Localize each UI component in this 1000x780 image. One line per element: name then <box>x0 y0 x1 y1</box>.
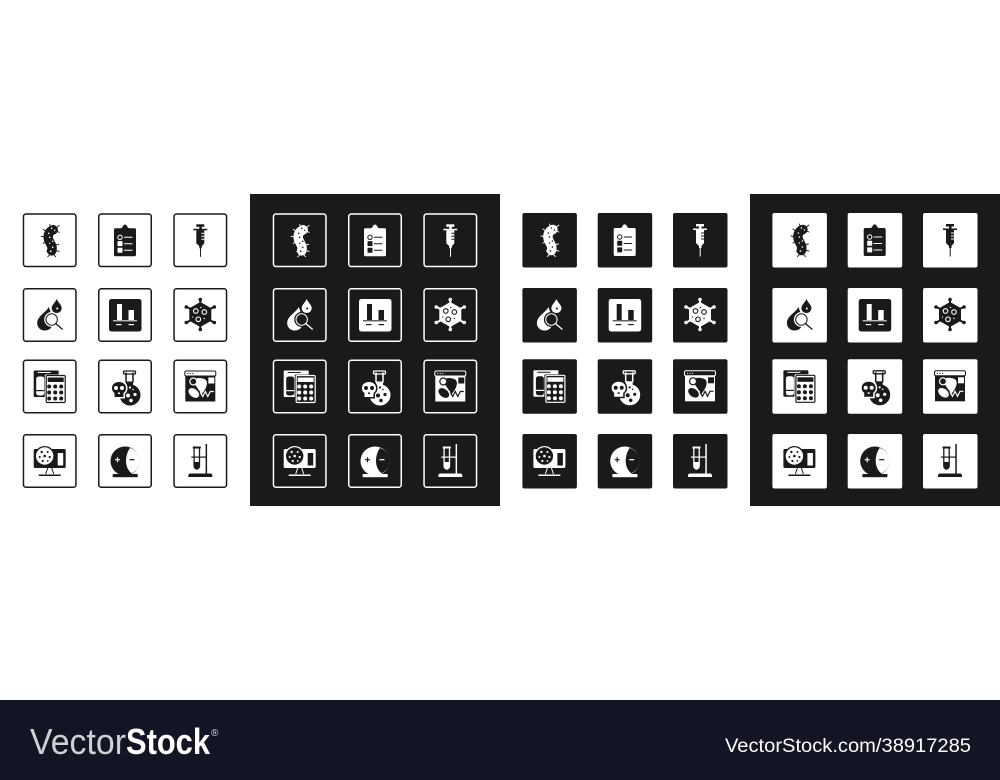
icon: syringe <box>174 214 227 267</box>
icon: petri dish monitor <box>273 435 326 487</box>
icon: flask and skull <box>349 360 401 413</box>
icon: browser window with scan <box>174 360 227 413</box>
icon: bacteria <box>273 214 326 267</box>
icon: bar chart <box>349 289 401 341</box>
icon: blood drop with magnifier <box>273 289 326 341</box>
icon: bacteria <box>23 214 76 267</box>
icon: flask and skull <box>848 359 902 414</box>
icon: flask and skull <box>598 359 652 414</box>
panel: black with outlined tiles <box>250 194 500 506</box>
icon: clipboard checklist <box>848 213 902 268</box>
footer logo: Stock <box>126 721 211 762</box>
icon: bar chart <box>848 288 902 342</box>
icon: virus <box>923 288 978 342</box>
icon: petri dish monitor <box>772 434 827 488</box>
panel: black with solid white tiles <box>750 194 1000 506</box>
icon: bar chart <box>99 289 151 341</box>
icon: clipboard checklist <box>598 213 652 268</box>
icon: virus <box>174 289 227 341</box>
icon: test tube on stand <box>424 435 477 487</box>
icon: calculator and device <box>23 360 76 413</box>
panel: white with solid black tiles <box>522 213 728 488</box>
icon: bar chart <box>598 288 652 342</box>
icon: charge sphere <box>848 434 902 488</box>
icon: charge sphere <box>598 434 652 488</box>
icon: clipboard checklist <box>349 214 401 267</box>
icon: browser window with scan <box>923 359 978 414</box>
icon: syringe <box>673 213 728 268</box>
icon: bacteria <box>522 213 577 268</box>
icon: syringe <box>923 213 978 268</box>
icon: blood drop with magnifier <box>522 288 577 342</box>
icon: virus <box>673 288 728 342</box>
footer logo: ® <box>211 728 219 739</box>
icon: bacteria <box>772 213 827 268</box>
icon: calculator and device <box>522 359 577 414</box>
icon: petri dish monitor <box>23 435 76 487</box>
icon: flask and skull <box>99 360 151 413</box>
icon: syringe <box>424 214 477 267</box>
icon: virus <box>424 289 477 341</box>
panel: white with outlined tiles <box>23 214 227 487</box>
footer image id: VectorStock.com/38917285 <box>725 736 971 757</box>
icon: charge sphere <box>349 435 401 487</box>
icon: calculator and device <box>273 360 326 413</box>
footer bar <box>0 700 1000 780</box>
icon: clipboard checklist <box>99 214 151 267</box>
icon: charge sphere <box>99 435 151 487</box>
icon: browser window with scan <box>424 360 477 413</box>
icon: test tube on stand <box>673 434 728 488</box>
icon: test tube on stand <box>174 435 227 487</box>
footer logo <box>30 721 219 762</box>
icon: petri dish monitor <box>522 434 577 488</box>
icon: blood drop with magnifier <box>772 288 827 342</box>
icon: test tube on stand <box>923 434 978 488</box>
footer logo: Vector <box>30 721 126 762</box>
icon: browser window with scan <box>673 359 728 414</box>
icon: blood drop with magnifier <box>23 289 76 341</box>
icon: calculator and device <box>772 359 827 414</box>
